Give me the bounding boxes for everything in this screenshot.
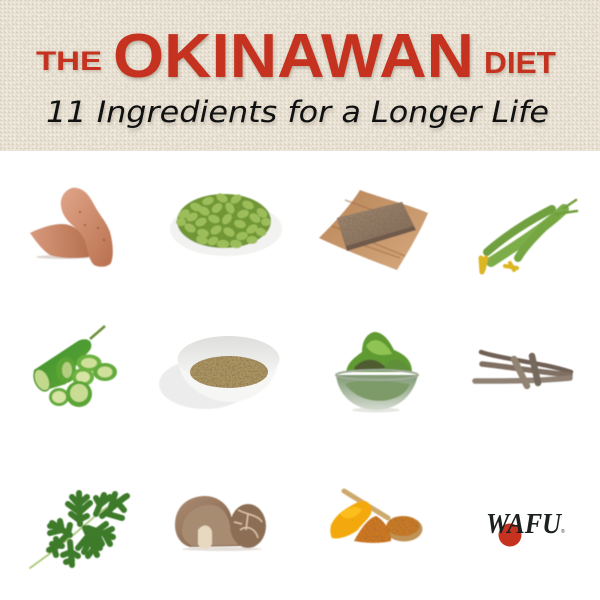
icon: turmeric with wooden spoon xyxy=(330,491,422,543)
icon: shiitake mushrooms xyxy=(175,496,266,551)
title: The Okinawan Diet: THE xyxy=(36,46,102,76)
title: The Okinawan Diet: OKINAWAN xyxy=(114,24,475,93)
title: The Okinawan Diet: OKINAWAN xyxy=(113,22,474,91)
icon: seaweed in glass bowl xyxy=(336,332,418,412)
icon: edamame on white plate xyxy=(170,192,282,256)
title: The Okinawan Diet: DIET xyxy=(485,47,556,82)
icon: konjac on wooden plate xyxy=(319,190,428,270)
icon: bowl of seeds xyxy=(159,336,280,409)
icon: luffa gourds xyxy=(481,200,577,272)
logo: Wafu: ® xyxy=(561,528,565,535)
title: The Okinawan Diet: THE xyxy=(37,47,103,77)
logo: Wafu: WAFU xyxy=(486,509,563,540)
header banner: linen background xyxy=(0,0,600,151)
subtitle: 11 Ingredients for a Longer Life xyxy=(46,95,549,129)
icon: sweet potatoes xyxy=(30,188,113,267)
icon: mugwort sprig xyxy=(30,493,127,568)
icon: burdock roots xyxy=(475,352,571,386)
icon: sliced bitter melon xyxy=(31,326,117,407)
subtitle: 11 Ingredients for a Longer Life xyxy=(47,98,550,132)
title: The Okinawan Diet xyxy=(36,22,556,93)
title: The Okinawan Diet: DIET xyxy=(484,45,556,80)
